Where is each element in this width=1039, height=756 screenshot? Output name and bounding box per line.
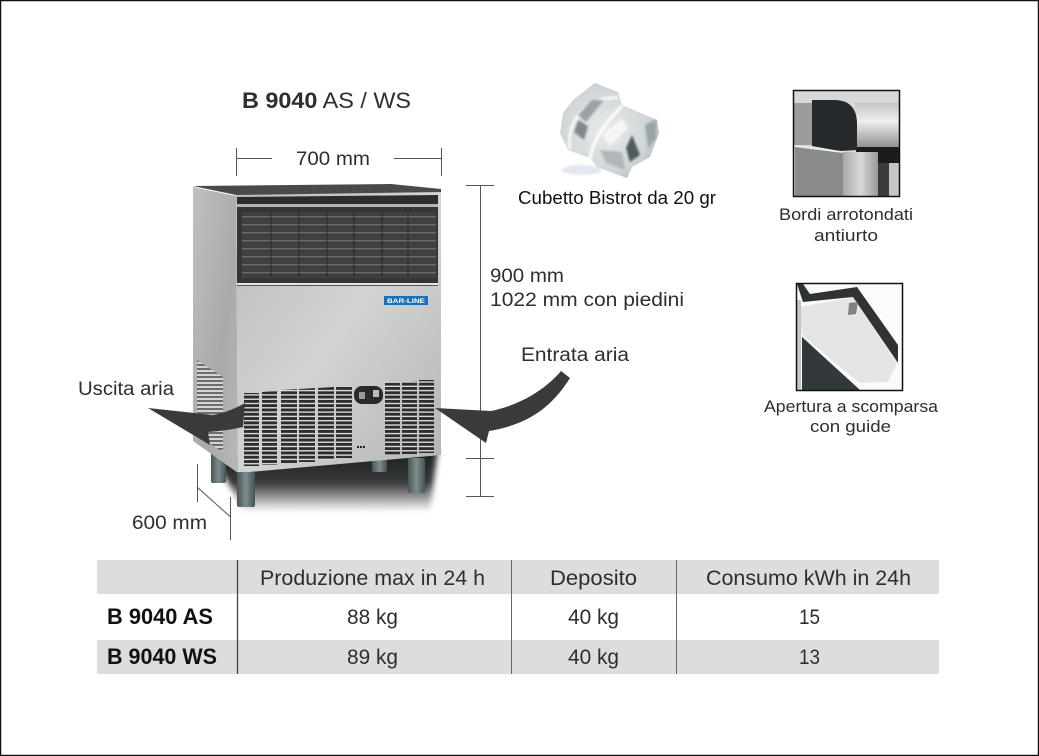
top cover	[193, 184, 441, 195]
table header row: Produzione max in 24 h	[260, 567, 485, 590]
table row: B 9040 AS: 88 kg	[347, 606, 398, 629]
table row: B 9040 WS	[97, 640, 939, 674]
caption: ice cube: Cubetto Bistrot da 20 gr	[518, 187, 716, 208]
table row: B 9040 WS: 89 kg	[347, 646, 398, 669]
arrow: air outlet: Uscita aria	[78, 379, 174, 400]
caption: concealed opening: Apertura a scomparsa	[764, 397, 939, 416]
side panel	[193, 187, 238, 473]
floor shadow	[215, 448, 438, 512]
side vent	[197, 360, 223, 452]
table row: B 9040 AS: 40 kg	[568, 606, 619, 629]
dimension: depth 600 mm	[132, 464, 230, 540]
control switch	[354, 386, 383, 404]
cube body	[560, 83, 659, 178]
table header row: Consumo kWh in 24h	[706, 567, 911, 590]
table row: B 9040 WS: 40 kg	[568, 646, 619, 669]
dimension: height	[466, 185, 684, 497]
arrow: air inlet	[435, 345, 629, 443]
specifications table	[97, 560, 939, 674]
detail photo: rounded edges	[794, 90, 900, 196]
upper grille	[237, 195, 438, 286]
cube shadow	[562, 165, 602, 175]
logo: BAR-LINE	[387, 299, 425, 305]
dimension: width 700 mm: 700 mm	[296, 149, 370, 170]
ice cube	[560, 83, 659, 178]
arrow: air outlet	[78, 379, 245, 445]
caption: rounded edges	[779, 205, 913, 245]
table row: B 9040 WS: 13	[799, 646, 820, 669]
caption: rounded edges: Bordi arrotondati	[779, 205, 913, 224]
lower louvers	[244, 380, 434, 466]
table header row: Deposito	[550, 567, 637, 590]
caption: concealed opening	[764, 397, 939, 436]
table row: B 9040 AS: B 9040 AS	[107, 604, 213, 629]
front panel	[236, 191, 441, 473]
arrow: air inlet: Entrata aria	[521, 345, 629, 366]
dimension: depth 600 mm: 600 mm	[132, 513, 207, 534]
ice machine	[193, 184, 441, 512]
back legs	[211, 452, 387, 483]
dimension: width 700 mm	[236, 148, 442, 176]
title: B 9040 AS / WS	[242, 88, 411, 113]
caption: concealed opening: con guide	[810, 417, 891, 436]
logo	[384, 296, 428, 305]
detail photo: concealed opening	[796, 284, 902, 391]
table row: B 9040 WS: B 9040 WS	[107, 644, 217, 669]
indicator lights	[357, 446, 365, 448]
dimension: height: 1022 mm con piedini	[490, 290, 684, 311]
front legs	[237, 458, 425, 507]
table header row	[97, 560, 939, 594]
caption: rounded edges: antiurto	[814, 226, 878, 245]
table row: B 9040 AS: 15	[799, 606, 820, 629]
dimension: height: 900 mm	[490, 266, 564, 287]
table row: B 9040 AS	[107, 604, 820, 629]
cube details	[569, 98, 656, 170]
